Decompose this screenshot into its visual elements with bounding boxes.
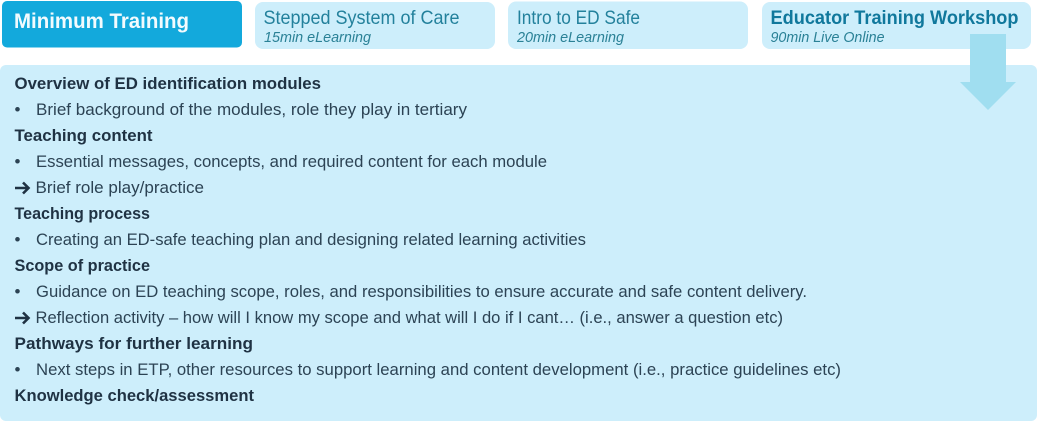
activity: role play: Brief role play/practice: [36, 178, 204, 197]
tab: Stepped System of Care: [255, 2, 495, 49]
bullet: scope guidance: Guidance on ED teaching scope, roles, and responsibilities to ensure accurate and safe content delivery.: [36, 282, 807, 301]
tab: Minimum Training: [2, 1, 242, 48]
heading: Teaching process: Teaching process: [14, 204, 150, 223]
activity: reflection: Reflection activity – how will I know my scope and what will I do if I cant… (i.e., answer a question etc): [36, 308, 783, 327]
heading: Pathways for further learning: Pathways for further learning: [14, 334, 253, 353]
arrow: down from workshop tab: [960, 34, 1016, 110]
tab: Minimum Training: Minimum Training: [14, 10, 189, 33]
heading: Teaching content: Teaching content: [14, 126, 153, 145]
bullet: teaching plan: Creating an ED-safe teaching plan and designing related learning activities: [36, 230, 586, 249]
bullet: next steps: Next steps in ETP, other resources to support learning and content development (i.e., practice guidelines etc): [36, 360, 841, 379]
tab: Stepped System of Care: 15min eLearning: [264, 29, 372, 46]
bullet: background of modules: Brief background of the modules, role they play in tertiary: [36, 100, 467, 119]
tab: Intro to ED Safe: [508, 2, 748, 49]
heading: Knowledge check/assessment: Knowledge check/assessment: [14, 386, 254, 405]
tab: Educator Training Workshop: 90min Live Online: [770, 29, 884, 46]
bullet: scope guidance: •: [14, 282, 20, 301]
tab: Educator Training Workshop: Educator Training Workshop: [770, 7, 1019, 29]
bullet: background of modules: •: [14, 100, 20, 119]
tab: Intro to ED Safe: Intro to ED Safe: [517, 7, 640, 29]
bullet: next steps: •: [14, 360, 20, 379]
tab: Educator Training Workshop: [762, 2, 1031, 49]
bullet: essential messages: Essential messages, concepts, and required content for each module: [36, 152, 547, 171]
heading: Overview of ED identification modules: Overview of ED identification modules: [14, 74, 321, 93]
bullet: teaching plan: •: [14, 230, 20, 249]
heading: Scope of practice: Scope of practice: [14, 256, 150, 275]
tab: Stepped System of Care: Stepped System of Care: [264, 7, 460, 29]
bullet: essential messages: •: [14, 152, 20, 171]
tab: Intro to ED Safe: 20min eLearning: [516, 29, 625, 46]
